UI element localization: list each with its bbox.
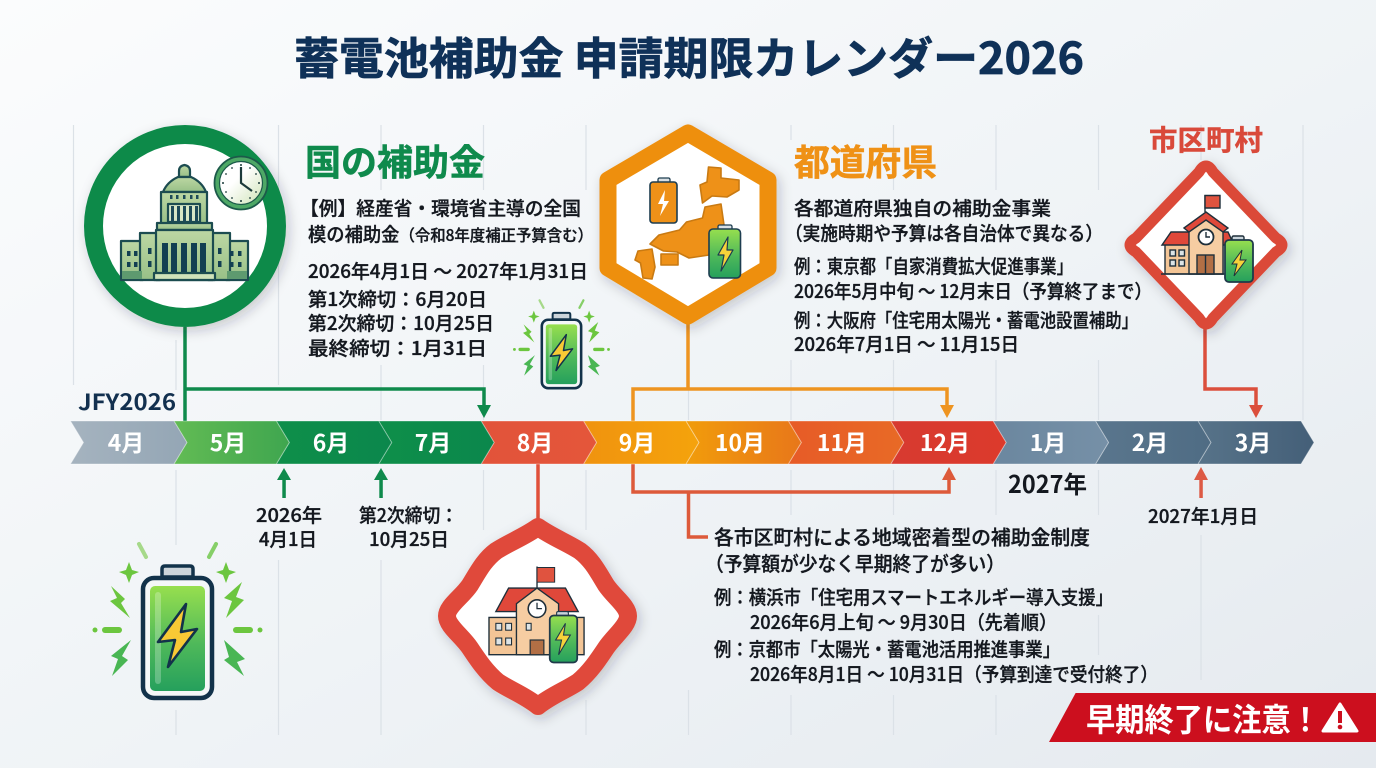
timeline: months: 8月 bbox=[517, 424, 553, 458]
year label: JFY2026: JFY2026 bbox=[78, 385, 176, 417]
connector: august to municipality badge bbox=[536, 464, 540, 520]
heading: prefectures: 都道府県 bbox=[794, 134, 937, 186]
icon: school in diamond bbox=[1130, 166, 1282, 324]
national subsidy description: 【例】経産省・環境省主導の全国 bbox=[300, 194, 581, 221]
arrow: start date bbox=[277, 468, 291, 498]
heading: municipalities: 市区町村 bbox=[1149, 119, 1263, 159]
prefecture example: tokyo: 2026年5月中旬 〜 12月末日（予算終了まで） bbox=[794, 277, 1152, 304]
municipality example: yokohama bbox=[714, 583, 1113, 635]
prefecture example: osaka bbox=[794, 306, 1138, 357]
national subsidy period: 2026年4月1日 〜 2027年1月31日 bbox=[308, 257, 588, 284]
connector: september to december below the timeline bbox=[633, 464, 956, 537]
connector: national subsidy to timeline bbox=[185, 327, 491, 421]
arrow: second deadline bbox=[374, 468, 388, 498]
timeline: months: 7月 bbox=[415, 424, 451, 458]
timeline: months: 9月 bbox=[619, 424, 655, 458]
connector: prefecture to timeline bbox=[633, 320, 954, 421]
label: year 2027: 2027年 bbox=[1008, 465, 1087, 500]
timeline: months: 10月 bbox=[715, 424, 765, 458]
timeline: months: 6月 bbox=[313, 424, 349, 458]
label: second deadline bbox=[359, 501, 458, 552]
prefectures description: 各都道府県独自の補助金事業 bbox=[794, 194, 1051, 221]
prefecture example: tokyo bbox=[794, 252, 1152, 304]
timeline: months: 3月 bbox=[1235, 424, 1271, 458]
timeline: months: 11月 bbox=[817, 424, 867, 458]
timeline: months: 12月 bbox=[920, 424, 970, 458]
panel: municipality description bbox=[705, 522, 1158, 687]
timeline: months: 4月 bbox=[108, 424, 144, 458]
timeline: months bbox=[70, 385, 1314, 464]
icon: japan map with batteries bbox=[608, 133, 768, 316]
panel: municipalities bbox=[1130, 119, 1282, 324]
label: second deadline: 10月25日 bbox=[369, 525, 449, 552]
municipality summary: 各市区町村による地域密着型の補助金制度 bbox=[714, 522, 1090, 550]
panel: prefectures bbox=[608, 133, 1152, 357]
label: start date bbox=[256, 501, 322, 552]
icon: large battery bbox=[92, 544, 262, 698]
national subsidy deadlines: 最終締切：1月31日 bbox=[308, 334, 487, 361]
municipality summary: （予算額が少なく早期終了が多い） bbox=[705, 548, 1005, 577]
prefecture example: osaka: 例：大阪府「住宅用太陽光・蓄電池設置補助」 bbox=[794, 306, 1138, 333]
prefecture example: tokyo: 例：東京都「自家消費拡大促進事業」 bbox=[794, 252, 1073, 279]
arrow: january 2027 bbox=[1194, 467, 1208, 498]
prefecture example: osaka: 2026年7月1日 〜 11月15日 bbox=[794, 330, 1019, 357]
timeline: months: 2月 bbox=[1132, 424, 1168, 458]
municipality example: yokohama: 2026年6月上旬 〜 9月30日（先着順） bbox=[750, 608, 1057, 635]
icon: national diet building with clock bbox=[94, 134, 276, 318]
municipality example: kyoto bbox=[714, 635, 1158, 687]
connector: municipality to timeline bbox=[1205, 325, 1263, 418]
panel: national subsidy bbox=[94, 134, 610, 388]
municipality example: kyoto: 2026年8月1日 〜 10月31日（予算到達で受付終了） bbox=[750, 660, 1158, 687]
label: second deadline: 第2次締切： bbox=[359, 501, 458, 528]
prefectures description: （実施時期や予算は各自治体で異なる） bbox=[785, 219, 1103, 246]
icon: small battery bbox=[513, 300, 610, 388]
label: january 2027: 2027年1月日 bbox=[1148, 502, 1258, 529]
icon: warning triangle bbox=[1323, 704, 1357, 731]
label: start date: 4月1日 bbox=[259, 525, 317, 552]
national subsidy deadlines bbox=[308, 285, 494, 361]
timeline: months: 5月 bbox=[210, 424, 246, 458]
callout: early termination warning: 早期終了に注意！ bbox=[1086, 695, 1320, 741]
national subsidy description bbox=[300, 194, 593, 247]
prefectures description bbox=[785, 194, 1103, 246]
title: 蓄電池補助金 申請期限カレンダー2026 bbox=[294, 23, 1084, 87]
heading: national subsidy: 国の補助金 bbox=[305, 134, 485, 186]
municipality example: yokohama: 例：横浜市「住宅用スマートエネルギー導入支援」 bbox=[714, 583, 1113, 610]
national subsidy deadlines: 第1次締切：6月20日 bbox=[308, 285, 487, 312]
label: start date: 2026年 bbox=[256, 501, 322, 528]
municipality example: kyoto: 例：京都市「太陽光・蓄電池活用推進事業」 bbox=[714, 635, 1060, 662]
national subsidy deadlines: 第2次締切：10月25日 bbox=[308, 309, 494, 336]
municipality summary bbox=[705, 522, 1090, 577]
icon: school in red badge bbox=[447, 527, 628, 706]
timeline: months: 1月 bbox=[1030, 424, 1066, 458]
national subsidy description: 模の補助金（令和8年度補正予算含む） bbox=[308, 220, 593, 247]
